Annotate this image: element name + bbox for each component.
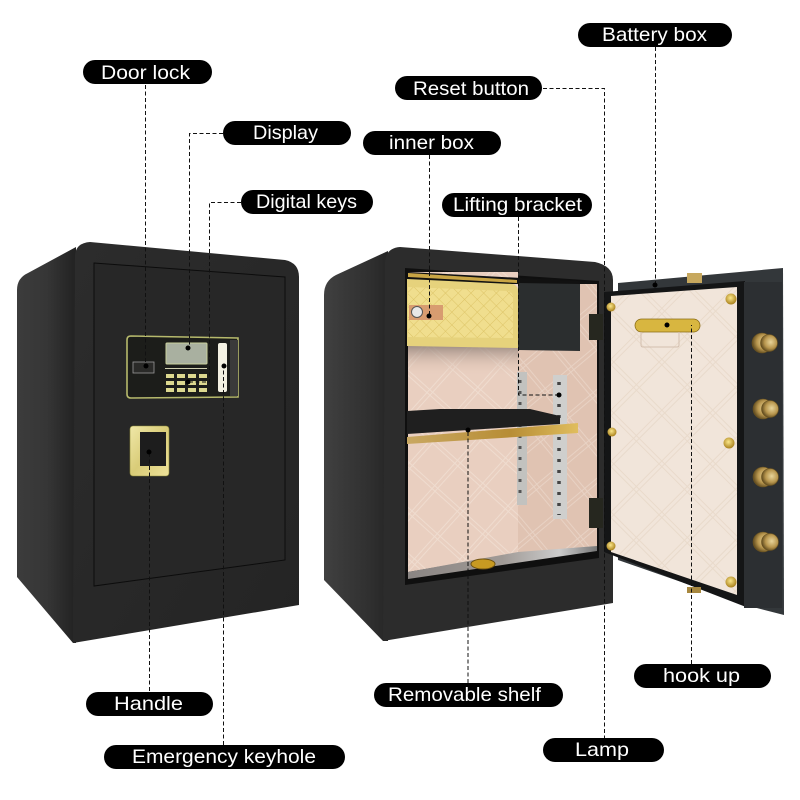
keys — [166, 374, 207, 392]
top gold strip — [408, 273, 517, 283]
top pin — [687, 273, 702, 283]
inner box — [407, 279, 518, 348]
removable shelf — [407, 409, 578, 444]
leader line end dots — [144, 282, 670, 454]
label: Removable shelf: Removable shelf — [388, 684, 542, 706]
interior walls — [408, 272, 597, 579]
label: Reset button — [395, 76, 542, 100]
label: Handle: Handle — [114, 693, 183, 715]
LCD display — [166, 343, 207, 364]
door frame — [604, 281, 746, 607]
label: Battery box: Battery box — [602, 24, 707, 46]
label: Digital keys: Digital keys — [256, 191, 357, 213]
gold hook bar — [635, 319, 700, 332]
label: Emergency keyhole — [104, 745, 345, 769]
left wall shadow band — [408, 346, 518, 376]
handle — [130, 426, 169, 476]
compartment — [518, 283, 580, 351]
label: Handle — [86, 692, 213, 716]
shelf mat — [407, 409, 560, 434]
open safe — [324, 247, 613, 641]
left wall — [408, 272, 518, 572]
right wall — [518, 282, 597, 553]
keypad lock panel — [127, 336, 238, 398]
locking bolts — [752, 333, 778, 552]
inner box front — [408, 287, 513, 338]
keyhole strip — [218, 343, 227, 392]
label: Door lock — [83, 60, 212, 84]
door outline — [94, 263, 285, 586]
label: Battery box — [578, 23, 732, 47]
cream lining — [611, 287, 737, 595]
top dark band — [408, 272, 597, 284]
bottom pin — [687, 587, 701, 593]
door back plate — [618, 268, 784, 615]
label: Digital keys — [241, 190, 373, 214]
lock end cap — [230, 340, 238, 396]
label: Lamp: Lamp — [575, 739, 629, 761]
floor — [408, 546, 597, 579]
door hinges — [589, 314, 603, 528]
leader lines — [146, 47, 692, 745]
label: Emergency keyhole: Emergency keyhole — [132, 746, 316, 768]
shelf edge — [407, 423, 578, 444]
label: Lamp — [543, 738, 664, 762]
closed safe — [17, 242, 299, 643]
safe opening — [405, 268, 599, 585]
right bracket — [553, 375, 567, 519]
inner box dial — [412, 306, 422, 318]
lock frame — [127, 336, 238, 398]
door screws — [606, 294, 736, 588]
top compartment — [407, 272, 597, 351]
label: Display: Display — [253, 122, 318, 144]
handle recess — [140, 432, 166, 466]
inner box lock — [409, 305, 443, 320]
label: Reset button: Reset button — [413, 78, 529, 100]
label: Lifting bracket: Lifting bracket — [453, 194, 583, 216]
separator — [165, 368, 207, 369]
safe side panel — [17, 247, 76, 643]
open door — [604, 268, 784, 615]
label: hook up: hook up — [663, 665, 740, 687]
lifting brackets — [517, 372, 567, 519]
label: hook up — [634, 664, 771, 688]
hook bracket — [641, 332, 679, 347]
open safe front frame — [383, 247, 613, 641]
safe front face — [73, 242, 299, 643]
bolt track — [744, 282, 782, 608]
bracket holes — [518, 380, 522, 500]
lamp — [471, 559, 495, 569]
left bracket — [517, 372, 527, 505]
label: Door lock: Door lock — [101, 62, 190, 84]
open safe side panel — [324, 251, 388, 641]
label: inner box: inner box — [389, 132, 474, 154]
label: inner box — [363, 131, 501, 155]
fingerprint window — [133, 362, 154, 373]
handle frame — [130, 426, 169, 476]
label: Display — [223, 121, 351, 145]
